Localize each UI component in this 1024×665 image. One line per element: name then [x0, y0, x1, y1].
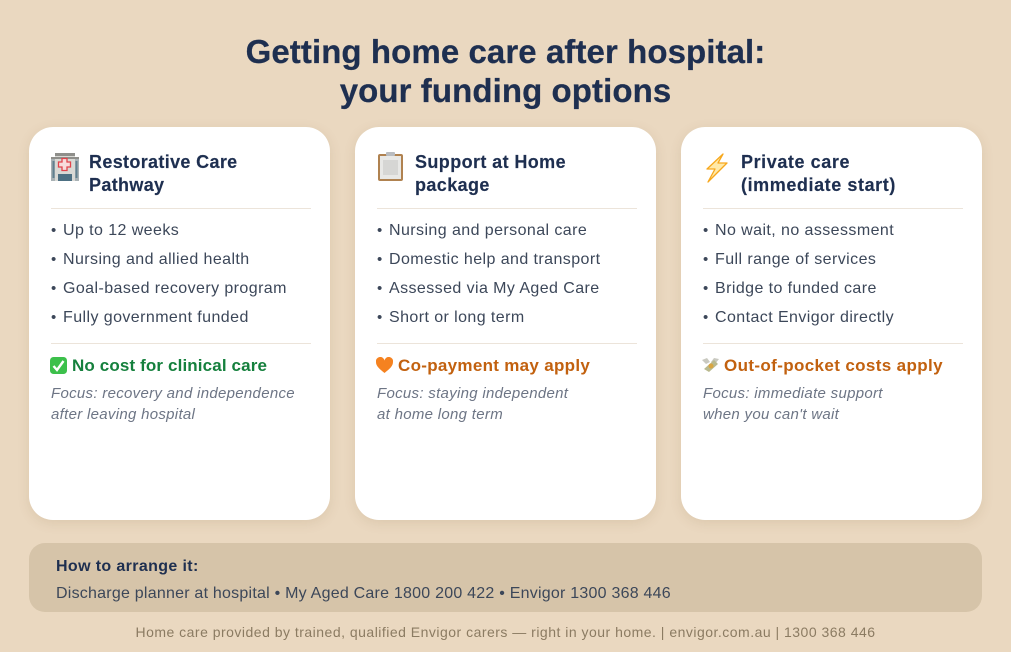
heading: Support at Home [415, 152, 566, 172]
heading: Restorative Care [89, 152, 238, 172]
icon: lightning bolt [706, 153, 728, 183]
focus note: after leaving hospital [51, 406, 195, 423]
focus note [377, 385, 568, 423]
panel: restorative care: Nursing and allied health [63, 251, 250, 268]
focus note: at home long term [377, 406, 503, 423]
focus note: Focus: immediate support [703, 385, 883, 402]
cost status: Out-of-pocket costs apply [724, 356, 943, 375]
bullet list [377, 222, 600, 326]
title [246, 33, 765, 110]
panel: support at home: Assessed via My Aged Care [389, 280, 600, 297]
bullet list: Nursing and personal care [389, 222, 587, 239]
panel: restorative care: Fully government funded [63, 309, 249, 326]
panel: private care: Bridge to funded care [715, 280, 877, 297]
title: your funding options [340, 72, 671, 109]
icon: hospital [51, 153, 79, 181]
panel: private care: • [703, 309, 709, 326]
panel: restorative care: • [51, 309, 57, 326]
panel: support at home: • [377, 251, 383, 268]
cost status: Co-payment may apply [398, 356, 590, 375]
panel: restorative care: Goal-based recovery program [63, 280, 287, 297]
bullet list: • [377, 222, 383, 239]
bullet list: No wait, no assessment [715, 222, 894, 239]
heading [415, 152, 566, 196]
panel: private care: Contact Envigor directly [715, 309, 894, 326]
panel: private care: Full range of services [715, 251, 876, 268]
heading [89, 152, 238, 196]
panel: how to arrange it [29, 543, 982, 612]
icon: orange heart [376, 357, 393, 373]
panel: private care [681, 127, 982, 520]
heading: Pathway [89, 175, 164, 195]
panel: restorative care: • [51, 280, 57, 297]
bullet list: • [51, 222, 57, 239]
panel: support at home: Short or long term [389, 309, 525, 326]
bullet list [51, 222, 287, 326]
panel: support at home: Domestic help and transport [389, 251, 600, 268]
contact details: Discharge planner at hospital • My Aged Care 1800 200 422 • Envigor 1300 368 446 [56, 585, 671, 602]
bullet list: • [703, 222, 709, 239]
heading [741, 152, 896, 196]
panel: support at home: • [377, 280, 383, 297]
focus note [51, 385, 295, 423]
focus note: when you can't wait [703, 406, 839, 423]
footer: Home care provided by trained, qualified Envigor carers — right in your home. | envigor.com.au | 1300 368 446 [135, 624, 876, 640]
title: Getting home care after hospital: [246, 33, 765, 70]
panel: support at home [355, 127, 656, 520]
heading: (immediate start) [741, 175, 896, 195]
icon: check mark [50, 357, 67, 374]
heading: Private care [741, 152, 850, 172]
panel: restorative care [29, 127, 330, 520]
arrange heading: How to arrange it: [56, 558, 199, 575]
heading: package [415, 175, 490, 195]
bullet list: Up to 12 weeks [63, 222, 179, 239]
cost status: No cost for clinical care [72, 356, 267, 375]
panel: private care: • [703, 280, 709, 297]
panel: private care: • [703, 251, 709, 268]
icon: money with wings [702, 358, 719, 372]
panel: support at home: • [377, 309, 383, 326]
bullet list [703, 222, 894, 326]
panel: restorative care: • [51, 251, 57, 268]
focus note [703, 385, 883, 423]
icon: clipboard [378, 152, 403, 181]
focus note: Focus: recovery and independence [51, 385, 295, 402]
focus note: Focus: staying independent [377, 385, 568, 402]
